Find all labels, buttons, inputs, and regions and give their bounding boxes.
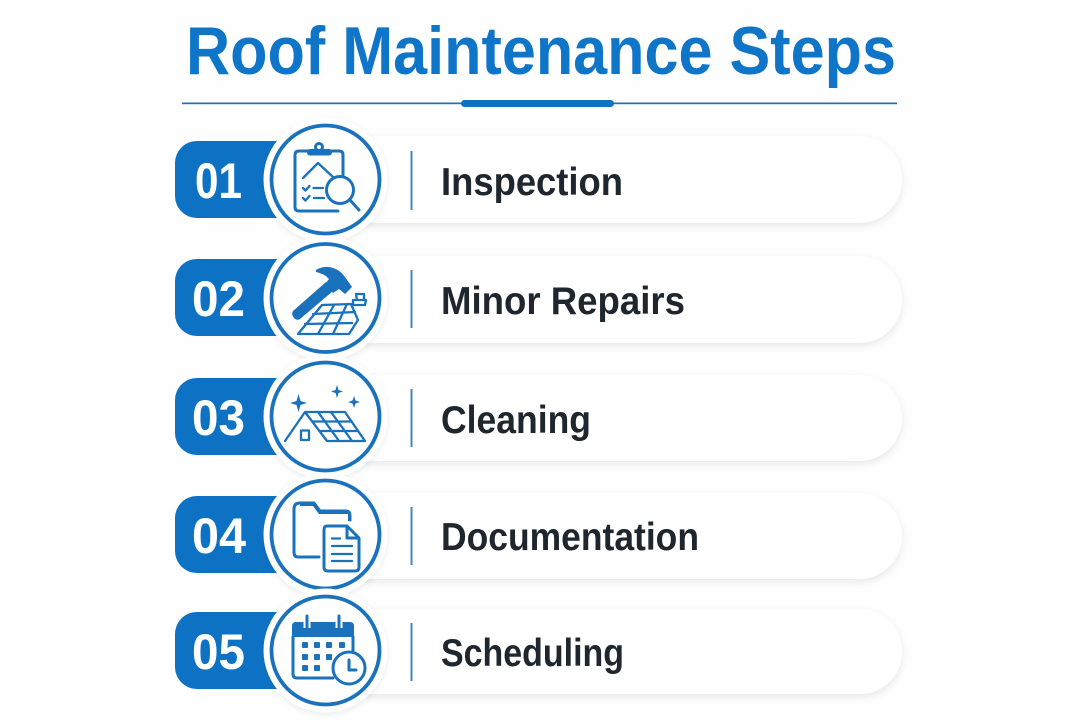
number: 03 (192, 390, 245, 446)
number badge (175, 141, 300, 218)
number: 02 (192, 271, 245, 327)
label: Inspection (441, 161, 623, 204)
label: Documentation (441, 516, 699, 559)
label: Scheduling (441, 632, 624, 675)
label: Minor Repairs (441, 280, 685, 323)
icon: calendar with clock (292, 616, 365, 684)
label pill (330, 493, 902, 579)
label pill (330, 136, 902, 223)
step 01: Inspection (175, 118, 902, 242)
icon: hammer and roof tiles (292, 267, 366, 334)
step 04: Documentation (175, 472, 902, 596)
icon: clean roof with sparkles (285, 385, 365, 441)
number: 04 (192, 508, 246, 564)
separator (410, 389, 412, 447)
number badge (175, 612, 300, 689)
separator (410, 623, 412, 681)
step 05: Scheduling (175, 588, 902, 712)
icon circle (264, 236, 388, 360)
separator (410, 270, 412, 328)
number: 05 (192, 624, 245, 680)
number badge (175, 378, 300, 455)
label pill (330, 609, 902, 694)
number badge (175, 496, 300, 573)
icon: folder and document (294, 502, 359, 571)
number badge (175, 259, 300, 336)
separator (410, 151, 412, 210)
label pill (330, 375, 902, 461)
title: Roof Maintenance Steps (186, 13, 896, 89)
icon circle (264, 588, 388, 712)
icon circle (264, 118, 388, 242)
icon: clipboard with magnifier (295, 144, 359, 211)
title divider (182, 100, 897, 107)
label: Cleaning (441, 399, 591, 442)
icon circle (264, 354, 388, 478)
icon circle (264, 472, 388, 596)
number: 01 (195, 153, 242, 209)
label pill (330, 256, 902, 343)
step 03: Cleaning (175, 354, 902, 478)
step 02: Minor Repairs (175, 236, 902, 360)
separator (410, 507, 412, 565)
